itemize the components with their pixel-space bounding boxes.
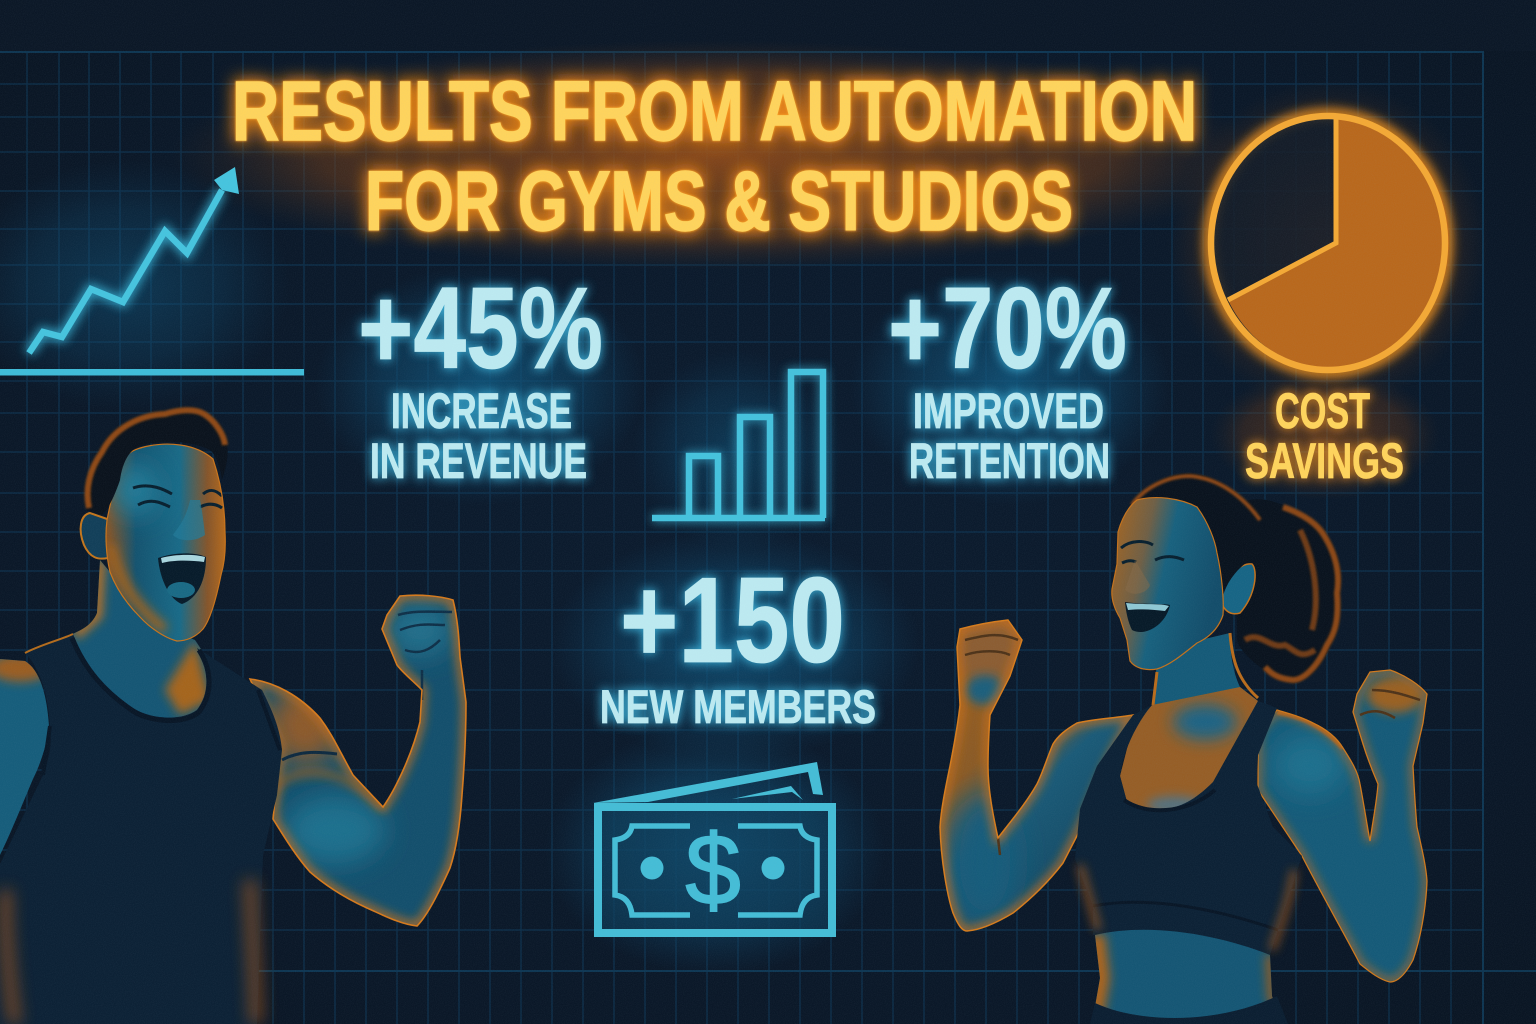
stat: +150 new members — [600, 552, 876, 733]
stat: +70% improved retention: IMPROVED — [913, 383, 1104, 439]
stat: +45% increase in revenue: INCREASE — [391, 383, 572, 439]
stat: +45% increase in revenue — [358, 263, 603, 489]
stat: +45% increase in revenue: +45% — [358, 263, 603, 393]
man: eyes and brows — [133, 486, 222, 508]
man: open mouth — [158, 553, 206, 604]
stat: +150 new members: +150 — [620, 552, 845, 688]
man: left arm — [0, 654, 50, 855]
woman: chest — [1120, 687, 1258, 814]
man: hair — [86, 408, 228, 515]
label: cost savings: SAVINGS — [1245, 433, 1404, 489]
stat: +45% increase in revenue: +45% — [358, 263, 603, 393]
title: RESULTS FROM AUTOMATION — [232, 64, 1197, 158]
top fade — [0, 0, 1536, 51]
woman: right arm and fist — [1258, 670, 1427, 982]
stat: +70% improved retention: RETENTION — [909, 433, 1110, 489]
label: cost savings — [1245, 383, 1404, 489]
stat: +45% increase in revenue: INCREASE — [391, 383, 572, 439]
figure: cheering woman — [940, 473, 1427, 1024]
woman: face — [1112, 498, 1223, 670]
title — [232, 64, 1197, 248]
woman: ear — [1220, 564, 1255, 614]
stat: +70% improved retention: +70% — [888, 263, 1127, 393]
stat: +70% improved retention: +70% — [888, 263, 1127, 393]
stat: +70% improved retention: RETENTION — [909, 433, 1110, 489]
stat: +150 new members: +150 — [620, 552, 845, 688]
stat: +150 new members: NEW MEMBERS — [600, 680, 876, 733]
woman: brows and eyes — [1121, 542, 1184, 563]
title: FOR GYMS & STUDIOS — [365, 154, 1073, 248]
icon: dollar bills — [593, 762, 832, 933]
label: cost savings: SAVINGS — [1245, 433, 1404, 489]
label: cost savings: COST — [1275, 383, 1370, 439]
stat: +45% increase in revenue: IN REVENUE — [370, 433, 587, 489]
woman: waistband — [1090, 996, 1288, 1024]
woman: sports top — [1075, 701, 1302, 955]
stat: +45% increase in revenue: IN REVENUE — [370, 433, 587, 489]
stat: +70% improved retention: IMPROVED — [913, 383, 1104, 439]
man: tank top — [0, 634, 282, 1024]
title: RESULTS FROM AUTOMATION — [232, 64, 1197, 158]
man: neck — [70, 560, 210, 718]
label: cost savings: COST — [1275, 383, 1370, 439]
man: face — [106, 444, 225, 641]
title: FOR GYMS & STUDIOS — [365, 154, 1073, 248]
stat: +150 new members: NEW MEMBERS — [600, 680, 876, 733]
woman: smiling mouth — [1125, 602, 1170, 632]
man: nose — [173, 500, 205, 540]
title: FOR GYMS & STUDIOS — [365, 154, 1073, 248]
woman: left arm and fist — [940, 614, 1133, 931]
figure: cheering man — [0, 408, 466, 1024]
pie chart: cost savings — [1209, 114, 1449, 372]
icon: dollar bills: $ — [685, 814, 741, 926]
woman: ponytail — [1235, 499, 1341, 683]
woman: midriff — [1095, 930, 1273, 1018]
woman: nose — [1125, 560, 1150, 594]
icon: rising line chart with arrow — [0, 167, 304, 376]
man: raised right arm and fist — [250, 595, 466, 926]
icon: bar chart — [652, 372, 825, 518]
title: RESULTS FROM AUTOMATION — [232, 64, 1197, 158]
man: ear — [81, 513, 110, 559]
woman: neck — [1153, 633, 1258, 760]
woman: hair crown — [1130, 473, 1265, 600]
stat: +70% improved retention — [888, 263, 1127, 489]
